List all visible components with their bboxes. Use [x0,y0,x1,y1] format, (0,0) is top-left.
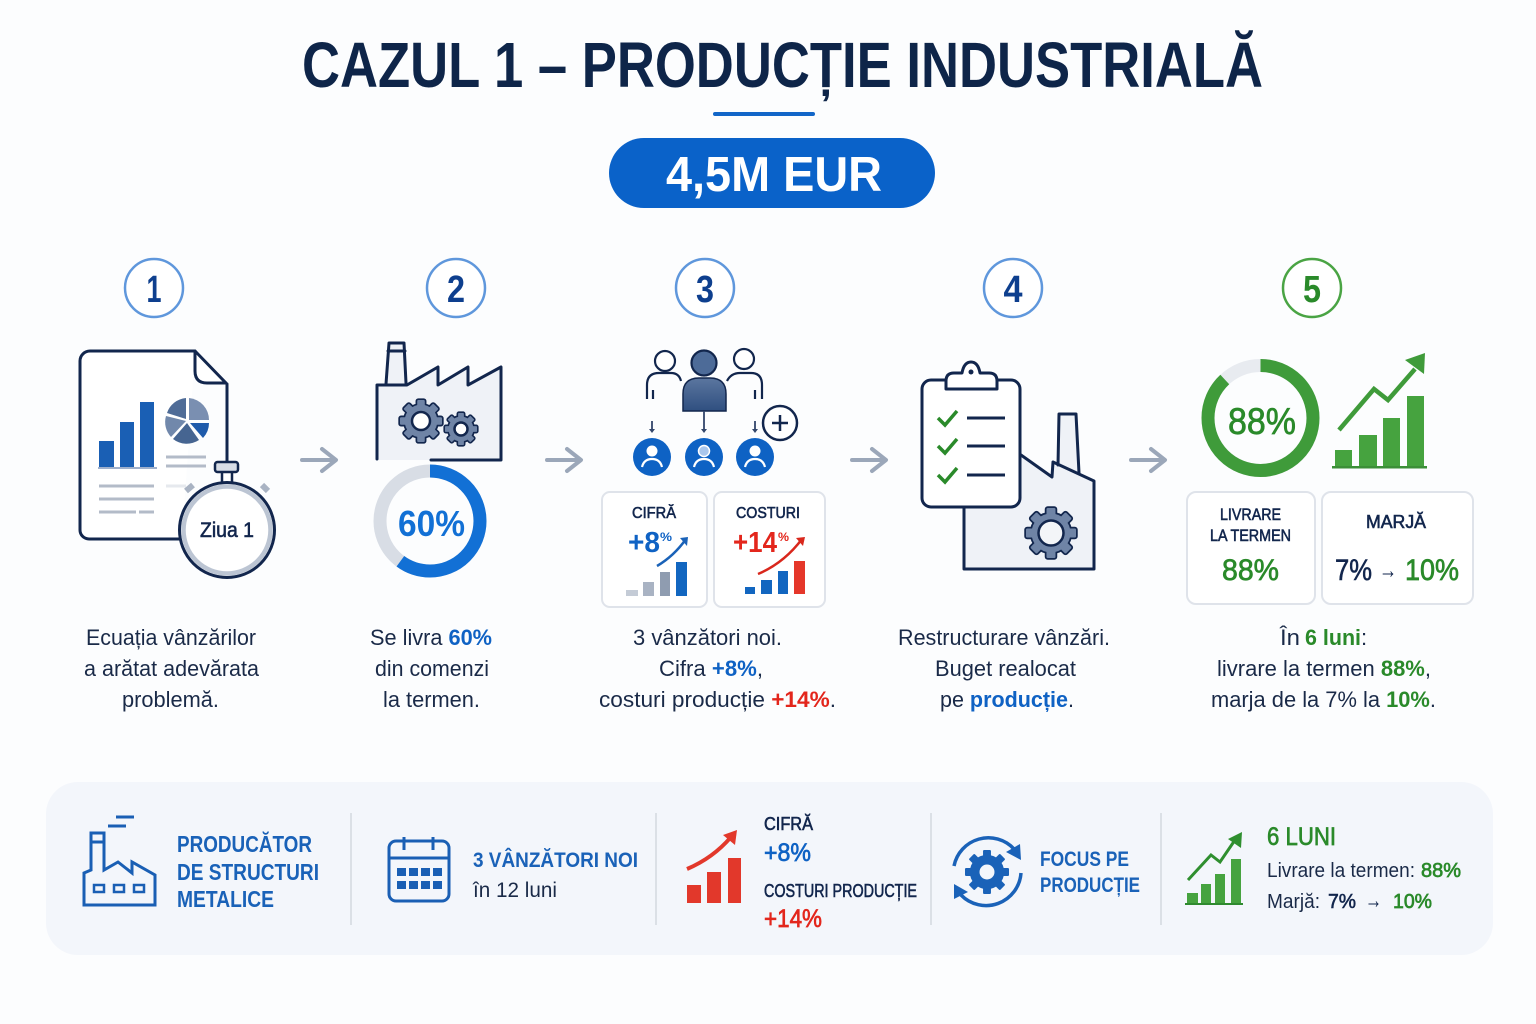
donut chart: 60%: 60% [398,503,465,544]
card: costuri +14%: COSTURI [736,505,800,522]
caption step 5: În [1279,625,1300,650]
icon: factory [84,817,155,905]
caption step 2 [370,625,492,712]
text: cifra and costuri productie: +8% [764,839,811,867]
text: producator: METALICE [177,886,274,912]
card: livrare la termen [1187,492,1315,604]
text: 6 luni results: 7% [1328,891,1356,913]
step number 5 [1283,259,1341,317]
donut chart: 88%: 88% [1228,401,1296,442]
summary panel [46,782,1493,955]
step number 3 [676,259,734,317]
card: marja: MARJĂ [1366,512,1426,532]
card: cifra +8%: +8 [628,527,660,559]
card: costuri +14%: % [778,530,789,544]
text: 3 vanzatori noi [472,848,638,902]
icon: report document with stopwatch [80,351,274,578]
text: focus pe productie [1040,848,1140,897]
card: costuri +14% [714,492,825,607]
text: 3 vanzatori noi: în 12 luni [472,879,557,902]
icon: green growth chart [1185,832,1243,905]
caption step 3 [599,625,836,712]
caption step 5: marja de la 7% la 10%. [1211,687,1436,712]
text: cifra and costuri productie: +14% [764,905,822,933]
text: 6 luni results: 6 LUNI [1267,823,1336,851]
title: CAZUL 1 – PRODUCȚIE INDUSTRIALĂ [302,29,1263,102]
caption step 1: Ecuația vânzărilor [86,625,256,650]
arrow 4 to 5 [1131,449,1165,471]
icon: factory with gears [377,343,501,460]
text: focus pe productie: FOCUS PE [1040,848,1129,871]
text: 6 luni results [1267,823,1461,914]
text: producator: PRODUCĂTOR [177,830,312,857]
card: livrare la termen: LIVRARE [1220,505,1281,524]
stopwatch: Ziua 1 [200,519,254,542]
budget pill: 4,5M EUR [666,148,882,202]
text: focus pe productie: PRODUCȚIE [1040,874,1140,897]
card: costuri +14%: +14 [733,527,777,559]
text: 6 luni results: 88% [1421,860,1461,882]
step number 4 [984,259,1042,317]
card: cifra +8% [602,492,707,607]
icon: red growth bars [687,830,741,903]
text: 6 luni results: → [1365,887,1382,914]
step number 2: 2 [447,269,465,311]
caption step 4: pe producție. [940,687,1074,712]
text: 6 luni results: Livrare la termen: [1267,860,1415,882]
step number 4: 4 [1004,269,1022,311]
card: marja: 7% [1335,554,1372,587]
text: 3 vanzatori noi: 3 VÂNZĂTORI NOI [473,848,638,872]
arrow 2 to 3 [547,449,581,471]
title underline [713,112,815,116]
icon: gear in rotating arrows [954,838,1021,906]
text: 6 luni results: 10% [1393,891,1432,913]
caption step 2: din comenzi [375,656,489,681]
step number 5: 5 [1303,269,1321,311]
icon: calendar [389,837,449,901]
step number 3: 3 [696,269,714,311]
caption step 3: Cifra +8%, [659,656,763,681]
donut chart: 60% [380,471,480,571]
text: cifra and costuri productie [764,814,917,933]
arrow 1 to 2 [302,449,336,471]
stopwatch [180,462,274,578]
text: cifra and costuri productie: CIFRĂ [764,814,813,834]
card: livrare la termen: LA TERMEN [1210,526,1291,545]
text: cifra and costuri productie: COSTURI PRODUCȚIE [764,881,917,901]
caption step 5: 6 luni [1305,625,1361,650]
caption step 2: la termen. [383,687,480,712]
card: marja [1322,492,1473,604]
icon: rising green bar chart [1332,353,1427,468]
caption step 5: livrare la termen 88%, [1217,656,1431,681]
step number 2 [427,259,485,317]
text: 6 luni results: Marjă: [1267,891,1320,913]
caption step 4 [898,625,1110,712]
caption step 1: a arătat adevărata [84,656,260,681]
card: cifra +8%: CIFRĂ [632,503,676,522]
card: cifra +8%: % [660,530,672,544]
caption step 5: : [1361,625,1367,650]
caption step 2: Se livra 60% [370,625,492,650]
text: producator [177,830,319,912]
card: marja: 10% [1405,554,1459,587]
step number 1 [125,259,183,317]
caption step 1: problemă. [122,687,219,712]
card: marja: → [1379,557,1397,584]
caption step 3: 3 vânzători noi. [633,625,782,650]
icon: sales team with three new hires [633,349,797,476]
donut chart: 88% [1208,366,1313,470]
caption step 4: Restructurare vânzări. [898,625,1110,650]
icon: checklist and factory [922,362,1095,569]
text: producator: DE STRUCTURI [177,859,319,885]
step number 1: 1 [146,269,162,311]
caption step 1 [84,625,260,712]
card: livrare la termen: 88% [1222,554,1279,587]
caption step 5 [1211,625,1436,712]
caption step 3: costuri producție +14%. [599,687,836,712]
budget pill [609,138,935,208]
arrow 3 to 4 [852,449,886,471]
caption step 4: Buget realocat [935,656,1076,681]
